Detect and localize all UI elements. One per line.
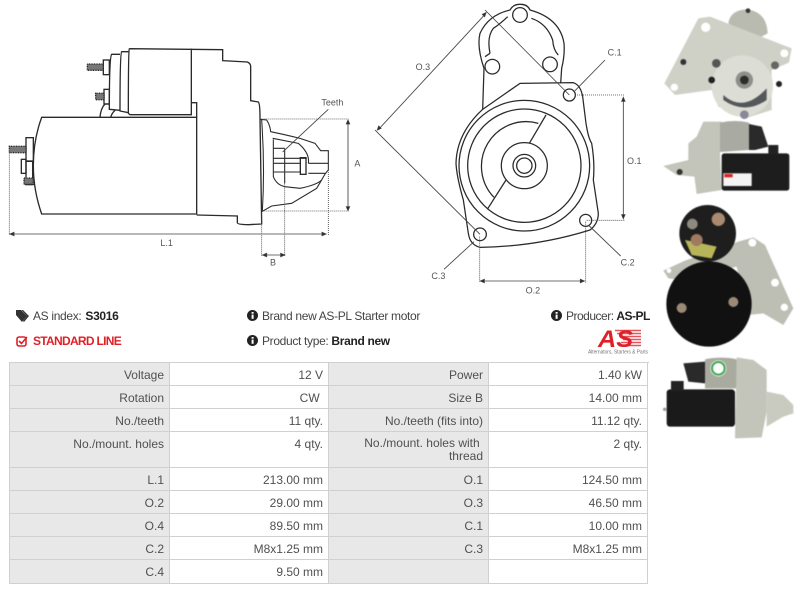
- icon: info: [551, 310, 562, 321]
- row: teeth: No./teeth (fits into): [385, 414, 483, 428]
- row: voltage / power: 12 V: [298, 368, 323, 382]
- row: O.4 / C.1: 10.00 mm: [589, 519, 642, 533]
- photo: side view with black housing: [663, 121, 789, 194]
- row: teeth: 11 qty.: [289, 414, 323, 428]
- row: rotation / size B: 14.00 mm: [589, 391, 642, 405]
- row: mounting holes: 2 qty.: [614, 437, 642, 451]
- dimension labels: C.3: [431, 271, 445, 281]
- upper flange: [479, 4, 564, 109]
- terminal bolts: [9, 60, 109, 185]
- info: standard line: STANDARD LINE: [33, 334, 121, 348]
- row: voltage / power: 1.40 kW: [598, 368, 642, 382]
- row: mounting holes: No./mount. holes: [73, 437, 164, 451]
- row: mounting holes: No./mount. holes with: [364, 436, 480, 450]
- dimension labels: O.1: [627, 156, 642, 166]
- technical drawing: side view: [8, 48, 360, 268]
- row: voltage / power: Power: [449, 368, 483, 382]
- row: mounting holes: 4 qty.: [295, 437, 323, 451]
- row: O.4 / C.1: C.1: [464, 519, 483, 533]
- info: description: Brand new AS-PL Starter motor: [262, 309, 420, 323]
- row: rotation / size B: [10, 386, 648, 409]
- photo: side view with green seal: [663, 357, 793, 438]
- icon: checked box: [16, 336, 28, 347]
- row: O.4 / C.1: O.4: [145, 519, 164, 533]
- row: O.2 / O.3: [10, 491, 648, 514]
- row: C.2 / C.3: M8x1.25 mm: [254, 542, 323, 556]
- photo: rear view with terminals: [663, 205, 793, 347]
- row: voltage / power: [10, 363, 648, 386]
- info: product type: Product type: Brand new: [262, 334, 390, 348]
- row: C.2 / C.3: [10, 537, 648, 560]
- row: C.4: 9.50 mm: [276, 565, 323, 579]
- dimension lines: [9, 119, 348, 256]
- row: rotation / size B: CW: [300, 391, 320, 405]
- motor housing: [33, 117, 197, 214]
- row: teeth: No./teeth: [115, 414, 164, 428]
- info: AS index: AS index: S3016: [33, 309, 118, 323]
- dimension labels: A: [354, 159, 360, 169]
- row: teeth: 11.12 qty.: [591, 414, 642, 428]
- row: C.2 / C.3: M8x1.25 mm: [573, 542, 642, 556]
- row: O.4 / C.1: 89.50 mm: [270, 519, 323, 533]
- dimension labels: L.1: [160, 238, 173, 248]
- row: voltage / power: Voltage: [124, 368, 164, 382]
- dimension labels: [160, 97, 360, 268]
- dimension labels: C.2: [621, 258, 635, 268]
- technical drawing: front view: [374, 4, 642, 295]
- row: L.1 / O.1: 213.00 mm: [263, 473, 323, 487]
- row: C.2 / C.3: C.3: [464, 542, 483, 556]
- dimension labels: C.1: [608, 48, 622, 58]
- logo: AS-PL: [588, 327, 648, 355]
- row: O.2 / O.3: 46.50 mm: [589, 496, 642, 510]
- row: L.1 / O.1: L.1: [147, 473, 164, 487]
- product photos column: [662, 8, 794, 439]
- photo: front mounting plate: [664, 8, 792, 119]
- row: L.1 / O.1: [10, 468, 648, 491]
- solenoid and drive end outline: [100, 49, 262, 225]
- mounting holes: [474, 89, 592, 241]
- mounting plate outline: [456, 83, 598, 247]
- row: O.2 / O.3: O.2: [145, 496, 164, 510]
- dimension labels: O.3: [416, 62, 430, 72]
- row: L.1 / O.1: 124.50 mm: [582, 473, 642, 487]
- icon: info: [247, 335, 258, 346]
- row: teeth: [10, 409, 648, 432]
- icon: tags: [16, 310, 29, 322]
- row: O.2 / O.3: O.3: [464, 496, 483, 510]
- dimension labels: [416, 48, 642, 295]
- row: C.4: C.4: [145, 565, 164, 579]
- row: rotation / size B: Size B: [448, 391, 483, 405]
- dimension lines: [375, 10, 625, 283]
- row: O.4 / C.1: [10, 514, 648, 537]
- row: C.2 / C.3: C.2: [145, 542, 164, 556]
- bearing housing circles: [459, 100, 590, 231]
- icon: info: [247, 310, 258, 321]
- dimension arrows: [10, 109, 350, 257]
- row: L.1 / O.1: O.1: [464, 473, 483, 487]
- dimension labels: O.2: [526, 285, 540, 295]
- flange holes: [485, 8, 557, 74]
- dimension labels: B: [270, 258, 276, 268]
- dimension labels: Teeth: [321, 97, 343, 107]
- drive nose: [260, 119, 328, 212]
- row: C.4: [10, 560, 648, 584]
- row: O.2 / O.3: 29.00 mm: [270, 496, 323, 510]
- row: rotation / size B: Rotation: [119, 391, 164, 405]
- row: mounting holes: [10, 432, 648, 468]
- info: producer: Producer: AS-PL: [566, 309, 650, 323]
- row: mounting holes: thread: [449, 449, 483, 463]
- specification table: [9, 362, 649, 584]
